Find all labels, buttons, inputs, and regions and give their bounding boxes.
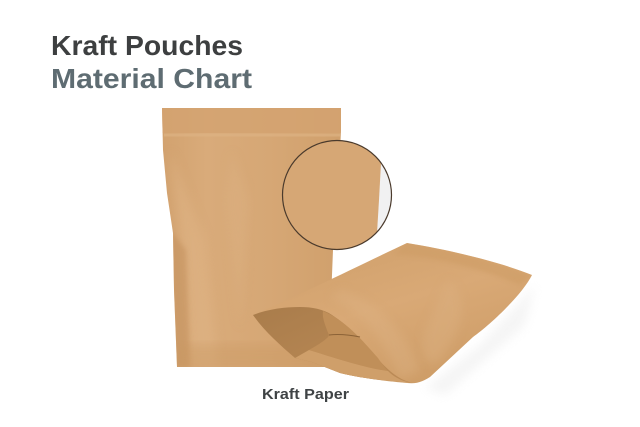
title xyxy=(51,30,252,94)
magnifier circle: paper texture detail xyxy=(280,135,392,255)
title line: Kraft Pouches: Kraft Pouches xyxy=(51,30,243,61)
title line: Material Chart: Material Chart xyxy=(51,63,252,94)
pouch opening xyxy=(253,307,413,383)
pouch inner front lip xyxy=(295,350,413,383)
pouch body xyxy=(253,243,532,383)
pouch inner crease xyxy=(329,335,360,337)
pouch shadow xyxy=(425,285,535,395)
standing kraft pouch xyxy=(160,106,343,370)
lying kraft pouch xyxy=(253,243,535,395)
label: Kraft Paper: Kraft Paper xyxy=(262,387,349,403)
pouch inner back wall xyxy=(309,311,388,371)
